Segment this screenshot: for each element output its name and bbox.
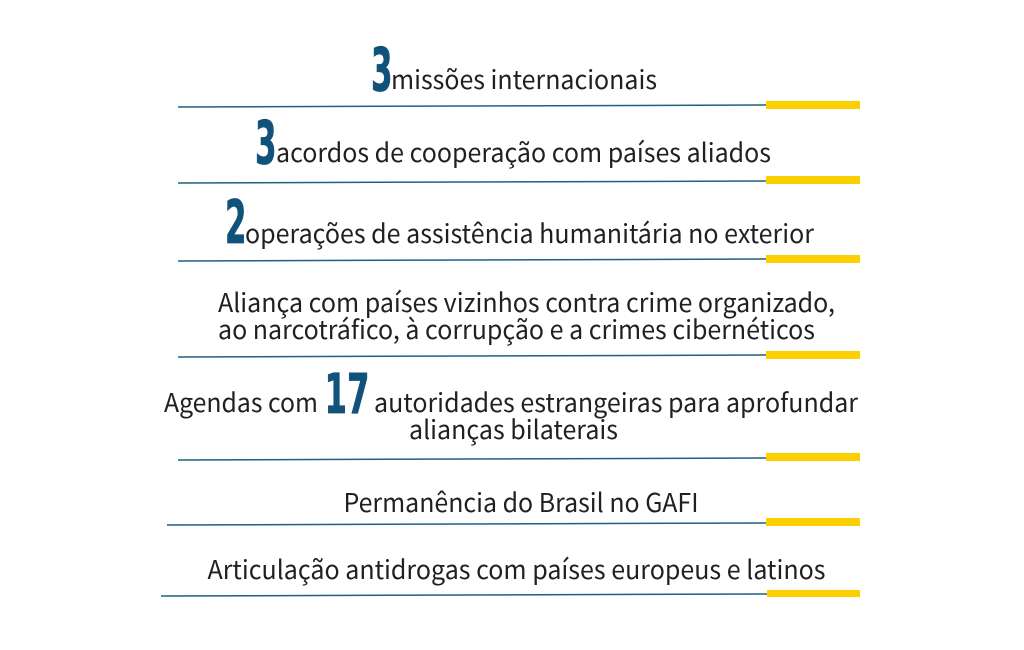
row 4: alliance with neighbours (178, 283, 860, 359)
row 6 text: Permanência do Brasil no GAFI (344, 483, 698, 520)
row 1 rule (178, 101, 860, 109)
row 4 text: Aliança com países vizinhos contra crime organizado, (218, 283, 835, 320)
row 5: foreign authorities (164, 362, 860, 461)
row 1 text: missões internacionais (391, 60, 657, 97)
row 5 text start: Agendas com (164, 383, 318, 420)
row 6 rule (167, 518, 860, 526)
row 2 text: acordos de cooperação com países aliados (276, 133, 771, 170)
row 5 rule (178, 453, 860, 461)
row 4 rule (178, 351, 860, 359)
number 3: 3 (255, 108, 276, 178)
row 5 text end: autoridades estrangeiras para aprofundar (374, 383, 859, 420)
row 3: humanitarian operations (178, 188, 860, 263)
row 3 rule (178, 255, 860, 263)
row 4 text (218, 283, 835, 347)
row 7 rule (161, 590, 860, 597)
row 4 text: ao narcotráfico, à corrupção e a crimes cibernéticos (218, 310, 815, 347)
row 7: anti-drug coordination (161, 550, 860, 597)
row 1: missions (178, 36, 860, 109)
row 5 text end: alianças bilaterais (409, 410, 618, 447)
number 3: 3 (371, 36, 392, 106)
row 3 text: operações de assistência humanitária no exterior (245, 214, 815, 251)
row 2: agreements (178, 108, 860, 184)
row 7 text: Articulação antidrogas com países europeus e latinos (208, 550, 826, 587)
row 6: GAFI (167, 483, 860, 526)
row 5 text end (374, 383, 859, 447)
number 2: 2 (225, 188, 246, 258)
row 2 rule (178, 176, 860, 184)
number 17: 17 (324, 362, 370, 426)
